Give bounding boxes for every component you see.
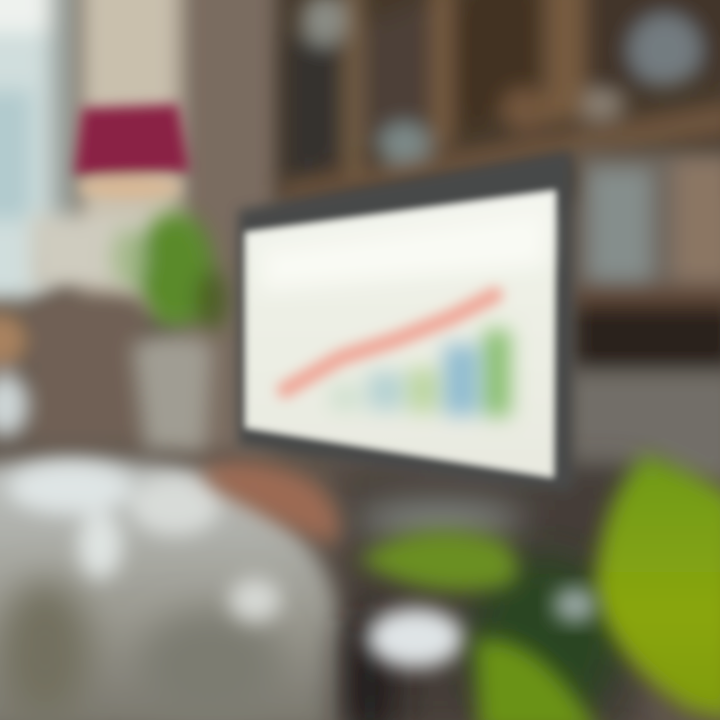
person: shoulder and sweater (0, 460, 340, 720)
sweater highlights (8, 462, 281, 622)
plant on the desk (112, 212, 228, 330)
right shelf section (570, 150, 720, 550)
desk surface (340, 470, 640, 720)
window (0, 0, 78, 300)
keyboard and desk items (345, 504, 525, 720)
left edge shapes (0, 312, 29, 437)
lamp (74, 104, 190, 198)
vase (132, 335, 212, 450)
small pale patch (553, 587, 597, 623)
chair back (30, 292, 150, 445)
leaf: bottom (475, 639, 600, 720)
lamp shade (74, 104, 190, 176)
monitor bezel (238, 150, 572, 492)
person: hand (200, 462, 339, 545)
monitor (238, 150, 572, 492)
leaf: bottom centre dark (470, 555, 620, 720)
foreground leaves (358, 455, 720, 720)
bookshelves (280, 0, 720, 205)
sweater shadows (0, 580, 280, 720)
chart: trend line (285, 295, 495, 390)
leaf: large right (595, 455, 720, 720)
monitor screen (245, 190, 556, 478)
chart header band (262, 212, 545, 290)
shelf compartments and objects (280, 0, 720, 205)
chart: bars (330, 330, 510, 416)
leaf: left horizontal (358, 531, 518, 591)
curtains (30, 0, 277, 450)
white object (367, 608, 463, 668)
